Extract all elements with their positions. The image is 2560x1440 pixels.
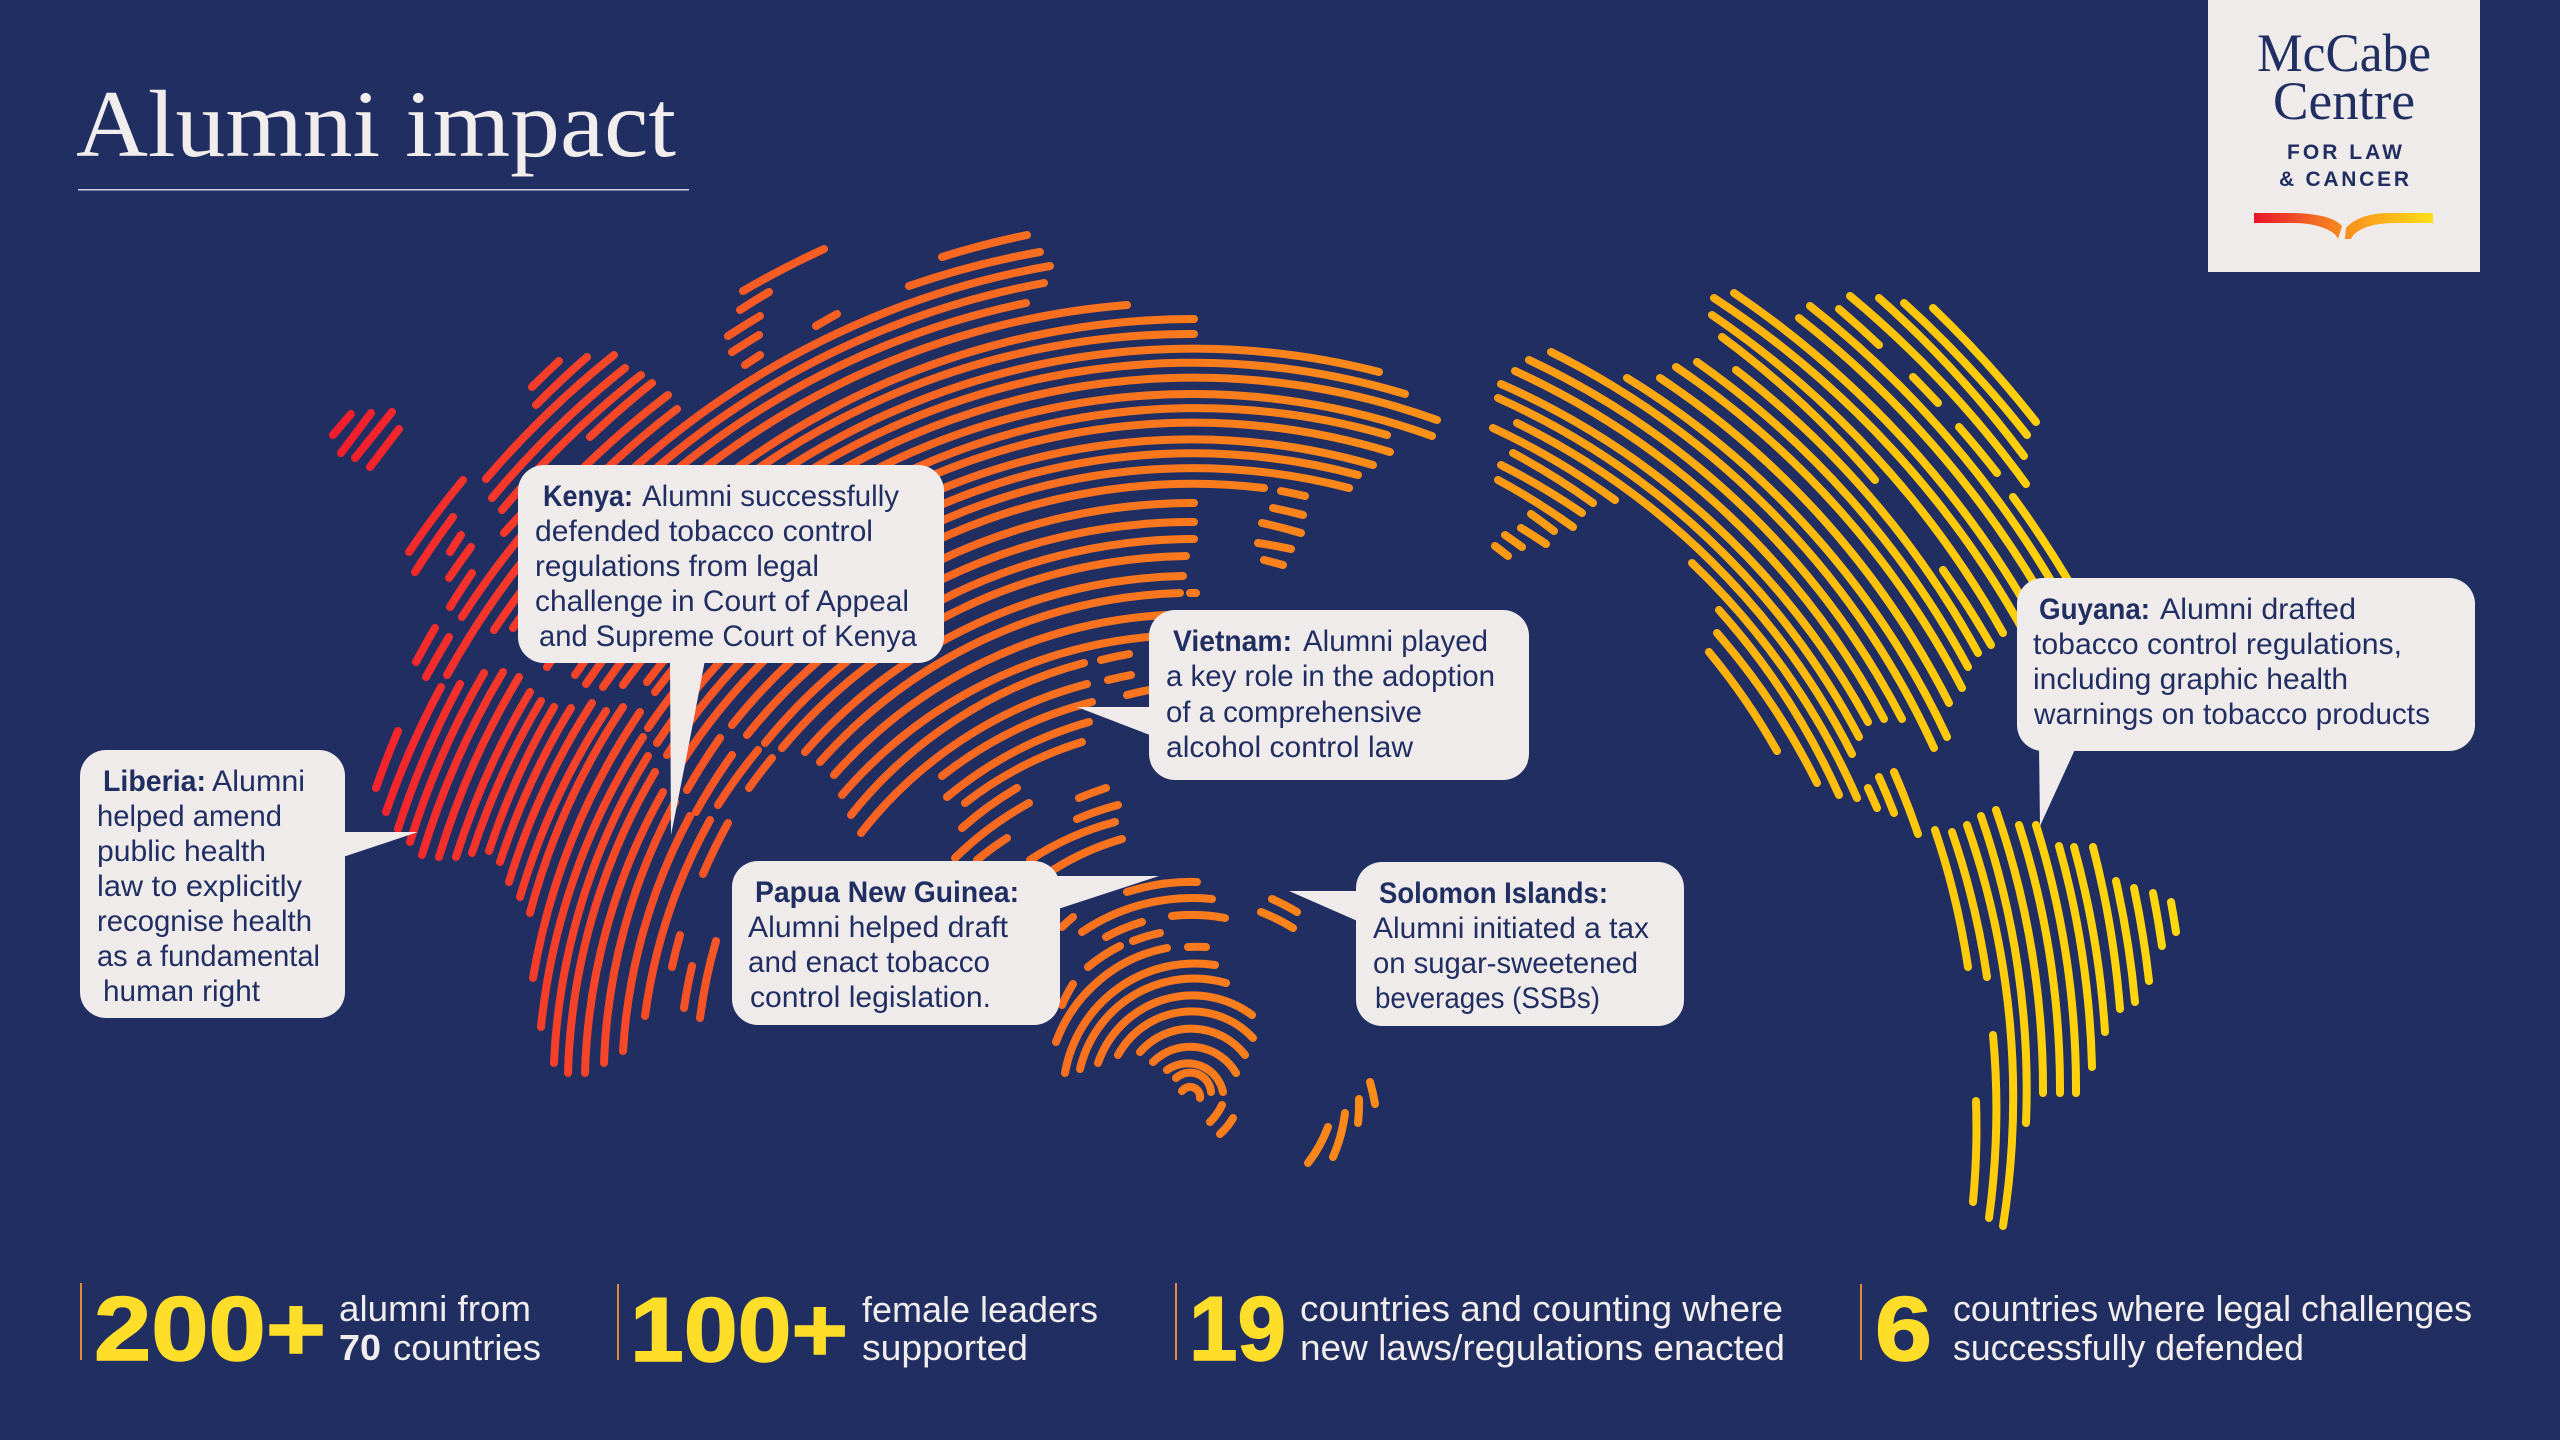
- stat: 100+ female leaders: supported: [862, 1327, 1028, 1368]
- stat: 19 countries: countries and counting where: [1300, 1288, 1783, 1329]
- callout: Papua New Guinea: control legislation.: [750, 981, 991, 1014]
- stat: 200+ alumni: 70: [339, 1327, 381, 1368]
- map region: northern Europe dashes: [728, 249, 837, 365]
- stat: 100+ female leaders: female leaders: [862, 1289, 1098, 1330]
- callout: Solomon Islands: beverages (SSBs): [1375, 982, 1600, 1015]
- callout: Guyana: tobacco control regulations,: [2033, 628, 2402, 661]
- stat: 6 countries: successfully defended: [1953, 1327, 2304, 1368]
- callout: Solomon Islands: on sugar-sweetened: [1373, 947, 1638, 980]
- callout: Vietnam: Alumni played: [1303, 625, 1488, 658]
- callout: Vietnam: of a comprehensive: [1166, 696, 1422, 729]
- map region: Solomon Islands: [1261, 899, 1297, 928]
- title: Alumni impact: [76, 71, 676, 177]
- callout: Guyana: Alumni drafted: [2160, 593, 2356, 626]
- map region: Greenland and northern Atlantic dashes: [333, 412, 399, 467]
- callout: Liberia: Alumni: [212, 765, 305, 798]
- callout: Liberia: public health: [97, 835, 266, 868]
- map region: North America: [1493, 293, 2075, 834]
- callout: Papua New Guinea: [732, 861, 1159, 1025]
- map region: New Zealand: [1308, 1082, 1375, 1163]
- stat: 200+ alumni: 200+: [94, 1279, 326, 1380]
- callout: Papua New Guinea: Alumni helped draft: [748, 911, 1009, 944]
- stat: 6 countries: [1860, 1279, 2472, 1380]
- callout: Papua New Guinea: Papua New Guinea:: [755, 876, 1019, 909]
- callout: Vietnam: alcohol control law: [1166, 731, 1413, 764]
- stat: 100+ female leaders: [617, 1280, 1098, 1381]
- callout: Solomon Islands: [1289, 862, 1684, 1026]
- callout: Liberia: [80, 750, 418, 1018]
- callout: Liberia: as a fundamental: [97, 940, 320, 973]
- stat: 6 countries: 6: [1875, 1279, 1932, 1380]
- stat: 200+ alumni: [80, 1279, 541, 1380]
- logo: McCabe Centre for Law and Cancer: [2208, 0, 2480, 272]
- logo: McCabe Centre for Law and Cancer: FOR LAW: [2287, 141, 2402, 164]
- callout: Liberia: helped amend: [97, 800, 282, 833]
- callout: Vietnam: a key role in the adoption: [1166, 660, 1495, 693]
- callout: Guyana: including graphic health: [2033, 663, 2348, 696]
- callout: Kenya: regulations from legal: [535, 550, 819, 583]
- callout: Solomon Islands: Solomon Islands:: [1379, 877, 1608, 910]
- callout: Guyana: [2017, 578, 2475, 826]
- callout: Kenya: Kenya:: [543, 480, 633, 513]
- stat: 19 countries: 19: [1189, 1279, 1286, 1380]
- logo: McCabe Centre for Law and Cancer: & CANCER: [2279, 168, 2409, 191]
- callout: Liberia: law to explicitly: [97, 870, 302, 903]
- logo: McCabe Centre for Law and Cancer: Centre: [2273, 71, 2415, 131]
- logo: McCabe Centre for Law and Cancer: McCabe: [2257, 23, 2431, 83]
- stat: 19 countries: [1175, 1279, 1785, 1380]
- map: fingerprint world map: [333, 235, 2176, 1226]
- callout: Kenya: defended tobacco control: [535, 515, 873, 548]
- map region: Australia fingerprint: [1056, 922, 1253, 1134]
- callout: Vietnam: [1077, 610, 1529, 780]
- stat: 200+ alumni: alumni from: [339, 1288, 531, 1329]
- callout: Liberia: recognise health: [97, 905, 312, 938]
- callout: Vietnam: Vietnam:: [1173, 625, 1292, 658]
- map region: Maritime Southeast Asia dashes: [1030, 788, 1225, 932]
- callout: Kenya: [518, 465, 944, 835]
- stat: 6 countries: countries where legal challenges: [1953, 1288, 2472, 1329]
- callout: Kenya: and Supreme Court of Kenya: [539, 620, 917, 653]
- stat: 19 countries: new laws/regulations enacted: [1300, 1327, 1785, 1368]
- callout: Kenya: Alumni successfully: [642, 480, 899, 513]
- callout: Solomon Islands: Alumni initiated a tax: [1373, 912, 1649, 945]
- map region: Europe and Africa and Asia arcs: [376, 235, 1437, 1073]
- stat: 100+ female leaders: 100+: [630, 1280, 848, 1381]
- map region: South America: [1935, 810, 2176, 1226]
- callout: Liberia: human right: [103, 975, 261, 1008]
- callout: Guyana: Guyana:: [2039, 593, 2150, 626]
- stat: 200+ alumni: countries: [393, 1327, 541, 1368]
- callout: Liberia: Liberia:: [103, 765, 206, 798]
- callout: Guyana: warnings on tobacco products: [2033, 698, 2430, 731]
- callout: Kenya: challenge in Court of Appeal: [535, 585, 909, 618]
- map region: eastern Asia dashes: [1258, 491, 1305, 565]
- callout: Papua New Guinea: and enact tobacco: [748, 946, 990, 979]
